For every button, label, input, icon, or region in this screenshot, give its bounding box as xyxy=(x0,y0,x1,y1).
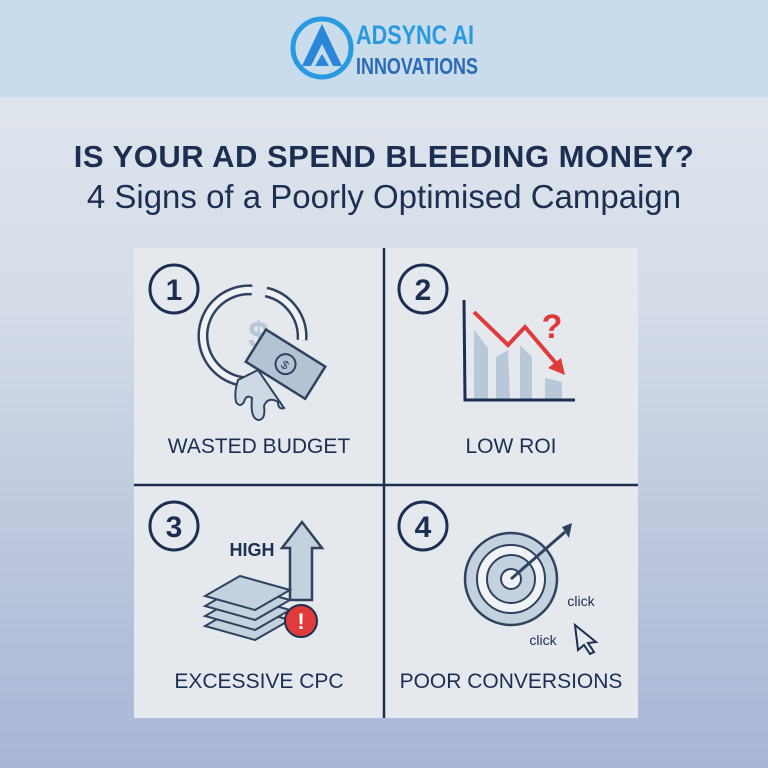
panel 1: wasted budget: WASTED BUDGET xyxy=(168,435,350,458)
panel 3: excessive CPC xyxy=(150,502,344,693)
panel 1: wasted budget: $ xyxy=(248,315,269,357)
title: IS YOUR AD SPEND BLEEDING MONEY? xyxy=(74,139,694,174)
panel 3: excessive CPC: ! xyxy=(297,609,305,634)
panel 2: low ROI: ? xyxy=(542,308,562,346)
panel 4: poor conversions: click xyxy=(529,632,558,648)
panel 4: poor conversions xyxy=(399,502,622,693)
logo xyxy=(290,16,478,80)
subtitle: 4 Signs of a Poorly Optimised Campaign xyxy=(87,178,681,215)
panel 2: low ROI: 2 xyxy=(415,274,431,307)
logo: INNOVATIONS xyxy=(356,53,478,79)
panel 2: low ROI xyxy=(399,265,575,458)
panel 4: poor conversions: POOR CONVERSIONS xyxy=(400,670,622,693)
header band xyxy=(0,0,768,97)
panel 4: poor conversions: click xyxy=(567,593,596,609)
panel 1: wasted budget: $ xyxy=(278,357,292,373)
panel 3: excessive CPC: 3 xyxy=(166,511,182,544)
panel 3: excessive CPC: EXCESSIVE CPC xyxy=(174,670,344,693)
panel 1: wasted budget xyxy=(150,265,350,458)
panel 1: wasted budget: 1 xyxy=(166,274,182,307)
panel 3: excessive CPC: HIGH xyxy=(230,540,274,560)
panel 2: low ROI: LOW ROI xyxy=(465,435,557,458)
panel 4: poor conversions: 4 xyxy=(415,511,432,544)
logo: ADSYNC AI xyxy=(356,20,474,50)
